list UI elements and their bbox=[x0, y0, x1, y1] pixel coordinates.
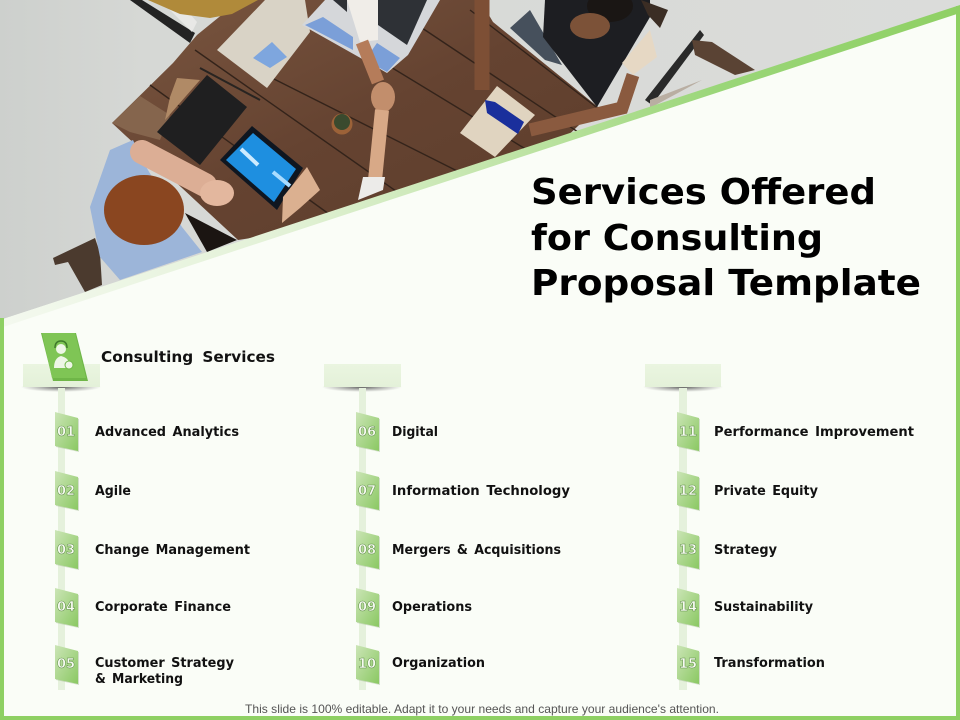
item 03: Change Management bbox=[95, 543, 250, 558]
item 04: 04 bbox=[57, 600, 75, 615]
column 1 list bbox=[55, 388, 250, 690]
title: Proposal Template bbox=[531, 263, 921, 304]
item 06: 06 bbox=[358, 425, 376, 440]
item 08 bbox=[356, 530, 561, 570]
icon: consultant book bbox=[41, 333, 88, 381]
person bottom-left bbox=[53, 140, 237, 292]
plant pot bbox=[332, 114, 352, 134]
column 2 header bar bbox=[322, 364, 402, 392]
white sleeve and arm from above bbox=[347, 0, 378, 42]
item 04: Corporate Finance bbox=[95, 600, 231, 615]
item 06 bbox=[356, 412, 438, 452]
title: Services Offered bbox=[531, 172, 876, 213]
item 09: 09 bbox=[358, 600, 376, 615]
arm lower bbox=[375, 110, 382, 180]
item 14: 14 bbox=[679, 600, 697, 615]
item 08: 08 bbox=[358, 543, 376, 558]
title: for Consulting bbox=[531, 218, 823, 259]
item 13 bbox=[677, 530, 778, 570]
tablet bbox=[220, 126, 303, 210]
item 07 bbox=[356, 471, 571, 511]
item 01: Advanced Analytics bbox=[95, 425, 239, 440]
column 1: header bar with icon and heading bbox=[21, 333, 275, 392]
black notebook bbox=[157, 75, 247, 165]
item 07: Information Technology bbox=[392, 484, 571, 499]
item 11 bbox=[677, 412, 914, 452]
heading: Consulting Services: Consulting Services bbox=[101, 348, 275, 366]
diagonal green band bbox=[0, 5, 960, 328]
item 15: Transformation bbox=[714, 656, 825, 671]
column 2 list bbox=[356, 388, 571, 690]
person right bbox=[460, 0, 755, 157]
person top: yellow shirt bbox=[148, 0, 258, 18]
item 05: Customer Strategy bbox=[95, 656, 235, 671]
laptop bbox=[302, 0, 440, 73]
footer note: This slide is 100% editable. Adapt it to your needs and capture your audience's attention. bbox=[245, 702, 719, 716]
item 10 bbox=[356, 645, 485, 685]
item 11: 11 bbox=[679, 425, 697, 440]
item 12 bbox=[677, 471, 819, 511]
item 04 bbox=[55, 588, 231, 628]
item 13: 13 bbox=[679, 543, 697, 558]
item 09: Operations bbox=[392, 600, 472, 615]
title bbox=[531, 172, 921, 304]
item 14: Sustainability bbox=[714, 600, 813, 615]
item 11: Performance Improvement bbox=[714, 425, 914, 440]
item 15 bbox=[677, 645, 825, 685]
item 03 bbox=[55, 530, 250, 570]
table bbox=[112, 0, 600, 245]
item 10: Organization bbox=[392, 656, 485, 671]
item 10: 10 bbox=[358, 657, 376, 672]
hand on tablet bbox=[282, 167, 320, 223]
item 06: Digital bbox=[392, 425, 438, 440]
column 3 header bar bbox=[643, 364, 723, 392]
handshake bbox=[371, 82, 395, 112]
item 13: Strategy bbox=[714, 543, 778, 558]
item 05: & Marketing bbox=[95, 672, 183, 687]
photo: team meeting around a table bbox=[0, 0, 960, 330]
item 07: 07 bbox=[358, 484, 376, 499]
item 02: 02 bbox=[57, 484, 75, 499]
item 05 bbox=[55, 645, 235, 687]
item 02 bbox=[55, 471, 131, 511]
item 14 bbox=[677, 588, 813, 628]
item 08: Mergers & Acquisitions bbox=[392, 543, 561, 558]
item 02: Agile bbox=[95, 484, 131, 499]
item 15: 15 bbox=[679, 657, 697, 672]
item 12: Private Equity bbox=[714, 484, 819, 499]
item 01 bbox=[55, 412, 239, 452]
item 01: 01 bbox=[57, 425, 75, 440]
item 03: 03 bbox=[57, 543, 75, 558]
item 09 bbox=[356, 588, 472, 628]
notebook beige bbox=[217, 0, 310, 88]
column 3 list bbox=[677, 388, 914, 690]
chair strip top-left bbox=[130, 0, 195, 43]
item 12: 12 bbox=[679, 484, 697, 499]
item 05: 05 bbox=[57, 657, 75, 672]
